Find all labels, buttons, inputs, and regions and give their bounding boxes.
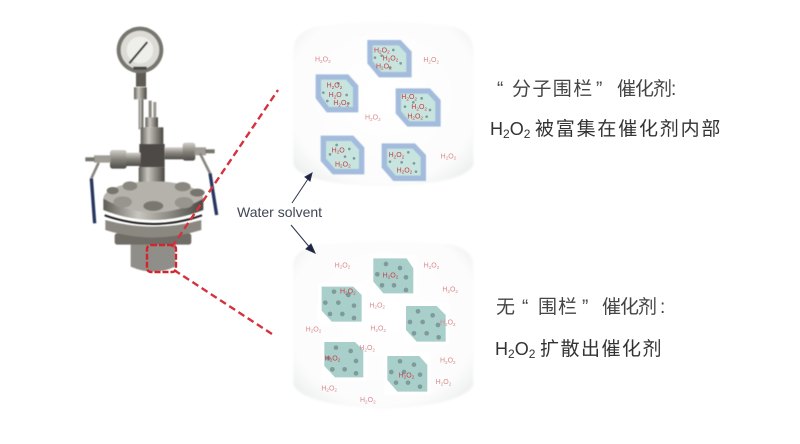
catalyst particle 4: 2 (330, 358, 333, 363)
catalyst particle 2: O (341, 100, 347, 107)
catalyst particle 2: H (333, 100, 338, 107)
free H2O2 labels: 2 (372, 347, 375, 352)
catalyst particle 3: 2 (414, 96, 417, 101)
catalyst particle 1: 2 (396, 275, 399, 280)
catalyst particle 5: 2 (402, 154, 405, 159)
free H2O2 labels: 2 (437, 265, 440, 270)
catalyst particle 5: 2 (402, 170, 405, 175)
free H2O2 labels: 2 (428, 59, 431, 64)
catalyst particle 5: H (399, 372, 404, 379)
text block: fence catalyst description: 2 (503, 127, 510, 141)
catalyst particle 4: O (339, 147, 345, 154)
catalyst particle 1: 2 (387, 50, 390, 55)
free H2O2 labels: O (431, 263, 437, 270)
text block: fence catalyst description: 被富集在催化剂内部 (535, 118, 722, 140)
free H2O2 labels: H (306, 326, 311, 333)
free H2O2 labels: 2 (445, 360, 448, 365)
free H2O2 labels: 2 (364, 347, 367, 352)
free H2O2 labels: 2 (441, 381, 444, 386)
free H2O2 labels: H (440, 320, 445, 327)
text block: no-fence catalyst description: 扩散出催化剂 (540, 338, 663, 360)
catalyst particle 5: 2 (410, 170, 413, 175)
catalyst particle 3: 2 (416, 106, 419, 111)
free H2O2 labels: 2 (373, 399, 376, 404)
free H2O2 labels: 2 (382, 305, 385, 310)
catalyst particle 2: 2 (340, 85, 343, 90)
catalyst particle 5 (382, 143, 426, 181)
text block: fence catalyst description: 2 (524, 127, 531, 141)
free H2O2 labels: H (321, 385, 326, 392)
catalyst particle 5: 2 (394, 154, 397, 159)
free H2O2 labels: 2 (453, 322, 456, 327)
text block: no-fence catalyst heading: 无 (496, 297, 515, 318)
catalyst particle 1: 2 (379, 50, 382, 55)
free H2O2 labels: O (443, 379, 449, 386)
catalyst particle 3: 2 (406, 96, 409, 101)
text block: no-fence catalyst description: 2 (529, 347, 536, 361)
text block: fence catalyst description: O (510, 119, 524, 139)
catalyst particle 1: 2 (389, 66, 392, 71)
photo: pressure reactor (85, 27, 217, 272)
catalyst particle 1: O (382, 47, 388, 54)
free H2O2 labels: H (436, 379, 441, 386)
catalyst particle 5: O (396, 152, 402, 159)
free H2O2 labels: 2 (447, 289, 450, 294)
free H2O2 labels: O (329, 385, 335, 392)
white halos behind particles (318, 255, 449, 394)
catalyst particle 1: H (383, 55, 388, 62)
icon: pressure gauge (117, 27, 163, 99)
free H2O2 labels: 2 (445, 322, 448, 327)
free H2O2 labels: 2 (455, 289, 458, 294)
catalyst particle 3: 2 (424, 106, 427, 111)
catalyst particle 2: H (340, 288, 345, 295)
catalyst particle 5 (387, 356, 427, 392)
free H2O2 labels: O (323, 57, 329, 64)
free H2O2 labels: O (342, 262, 348, 269)
text block: fence catalyst heading: 催化剂 (617, 78, 671, 100)
arrow: to upper vessel (292, 173, 312, 203)
free H2O2 labels: 2 (374, 305, 377, 310)
free H2O2 labels: O (448, 320, 454, 327)
catalyst particle 1: H (374, 47, 379, 54)
flange with bolts (103, 181, 205, 272)
free H2O2 labels: 2 (375, 328, 378, 333)
catalyst particle 2: 2 (338, 102, 341, 107)
free H2O2 labels: 2 (370, 117, 373, 122)
free H2O2 labels: 2 (453, 360, 456, 365)
free H2O2 labels: 2 (383, 328, 386, 333)
catalyst particle 4: H (332, 147, 337, 154)
side valves and handles (85, 143, 217, 223)
catalyst particle 3 (406, 306, 446, 342)
reactor stem and fittings (139, 99, 165, 202)
free H2O2 labels: O (448, 153, 454, 160)
text block: no-fence catalyst heading: “ (522, 297, 528, 318)
catalyst particle 3: H (407, 113, 412, 120)
catalyst particle 4: 2 (338, 358, 341, 363)
free H2O2 labels: O (367, 345, 373, 352)
catalyst particle 2: O (348, 288, 354, 295)
catalyst particle 4 (324, 342, 363, 377)
catalyst particle 2: 2 (353, 291, 356, 296)
label: water solvent: Water solvent (237, 204, 322, 220)
free H2O2 labels: O (377, 302, 383, 309)
free H2O2 labels: 2 (436, 59, 439, 64)
free H2O2 labels: O (313, 326, 319, 333)
free H2O2 labels: 2 (378, 117, 381, 122)
catalyst particle 2: 2 (346, 102, 349, 107)
catalyst particle 4: 2 (340, 164, 343, 169)
free H2O2 labels: H (442, 287, 447, 294)
catalyst particle 4: H (335, 161, 340, 168)
free H2O2 labels: 2 (319, 329, 322, 334)
free H2O2 labels: 2 (334, 388, 337, 393)
arrow: to lower vessel (291, 225, 315, 253)
text block: no-fence catalyst heading: : (660, 297, 665, 318)
free H2O2 labels: H (360, 397, 365, 404)
free H2O2 labels: 2 (348, 265, 351, 270)
text block: no-fence catalyst description: 2 (508, 347, 515, 361)
free H2O2 labels: O (378, 326, 384, 333)
free H2O2 labels: H (359, 345, 364, 352)
free H2O2 labels (315, 57, 457, 161)
free H2O2 labels: H (424, 263, 429, 270)
catalyst particle 1: O (384, 63, 390, 70)
free H2O2 labels: H (370, 326, 375, 333)
vessel body (293, 22, 473, 186)
catalyst particle 3: H (411, 104, 416, 111)
catalyst particle 3: O (419, 104, 425, 111)
catalyst particle 3: 2 (420, 116, 423, 121)
catalyst particle 2 (316, 74, 358, 112)
catalyst particle 5: 2 (404, 375, 407, 380)
catalyst particle 5: O (404, 167, 410, 174)
free H2O2 labels: 2 (328, 59, 331, 64)
catalyst particle 1 (373, 258, 413, 293)
catalyst particle 1: H (383, 272, 388, 279)
text block: fence catalyst heading: 分子围栏 (512, 78, 594, 100)
catalyst particle 2: O (334, 83, 340, 90)
catalyst particle 1: 2 (388, 58, 391, 63)
text block: fence catalyst description: H (490, 119, 503, 139)
free H2O2 labels: H (369, 302, 374, 309)
free H2O2 labels: 2 (449, 381, 452, 386)
free H2O2 labels: 2 (326, 388, 329, 393)
catalyst particle 1: O (390, 55, 396, 62)
catalyst particle 2: 2 (345, 291, 348, 296)
catalyst particle 5: O (406, 372, 412, 379)
text block: fence catalyst heading: : (671, 79, 676, 100)
catalyst particle 3: H (401, 94, 406, 101)
free H2O2 labels: 2 (311, 329, 314, 334)
text block: no-fence catalyst description: H (495, 339, 508, 359)
free H2O2 labels: 2 (320, 59, 323, 64)
free H2O2 labels: 2 (454, 156, 457, 161)
catalyst particle 3: O (409, 94, 415, 101)
panel: molecular fence catalyst vessel (293, 22, 473, 186)
catalyst particle 3 (396, 88, 441, 127)
free H2O2 labels: 2 (340, 265, 343, 270)
catalyst particle 1: H (376, 63, 381, 70)
red selection square (147, 245, 176, 272)
catalyst particle 1: O (390, 272, 396, 279)
catalyst particle 3: 2 (412, 116, 415, 121)
free H2O2 labels (306, 262, 458, 404)
text block: fence catalyst heading: ” (596, 79, 602, 100)
catalyst particle 1: 2 (388, 275, 391, 280)
catalyst particle 3: O (415, 113, 421, 120)
free H2O2 labels: H (365, 115, 370, 122)
catalyst particle 2 (322, 287, 362, 322)
text block: no-fence catalyst description: O (515, 339, 529, 359)
catalyst particle 5: H (389, 152, 394, 159)
free H2O2 labels: 2 (365, 399, 368, 404)
free H2O2 labels: H (440, 358, 445, 365)
catalyst particle 4 (321, 136, 364, 174)
free H2O2 labels: O (431, 57, 437, 64)
catalyst particle 1 (367, 40, 412, 77)
free H2O2 labels: H (335, 262, 340, 269)
catalyst particle 4: 2 (337, 150, 340, 155)
catalyst particle 4: 2 (348, 164, 351, 169)
panel: fence-free catalyst vessel (293, 241, 473, 408)
text block: no-fence catalyst heading: 围栏 (538, 296, 578, 318)
catalyst particle 5: H (397, 167, 402, 174)
catalyst particle 1: 2 (396, 58, 399, 63)
vessel body (293, 241, 473, 408)
catalyst particle 1: 2 (381, 66, 384, 71)
catalyst particle 2: 2 (332, 85, 335, 90)
catalyst particle 2: H (327, 83, 332, 90)
catalyst particle 4: H (325, 355, 330, 362)
free H2O2 labels: O (373, 115, 379, 122)
free H2O2 labels: H (441, 153, 446, 160)
catalyst particle 5: 2 (412, 375, 415, 380)
red dashed callout lines (172, 90, 278, 336)
free H2O2 labels: O (368, 397, 374, 404)
free H2O2 labels: H (423, 57, 428, 64)
text block: no-fence catalyst heading: ” (582, 297, 588, 318)
catalyst particle 4: O (332, 355, 338, 362)
text block: no-fence catalyst heading: 催化剂 (602, 296, 656, 318)
catalyst particle 2: O (336, 92, 342, 99)
free H2O2 labels: H (315, 57, 320, 64)
free H2O2 labels: 2 (429, 265, 432, 270)
catalyst particle 2: H (329, 92, 334, 99)
text block: fence catalyst heading: “ (497, 79, 503, 100)
catalyst particle 2: 2 (334, 94, 337, 99)
free H2O2 labels: O (448, 358, 454, 365)
catalyst particle 4: O (343, 161, 349, 168)
free H2O2 labels: O (450, 287, 456, 294)
free H2O2 labels: 2 (446, 156, 449, 161)
